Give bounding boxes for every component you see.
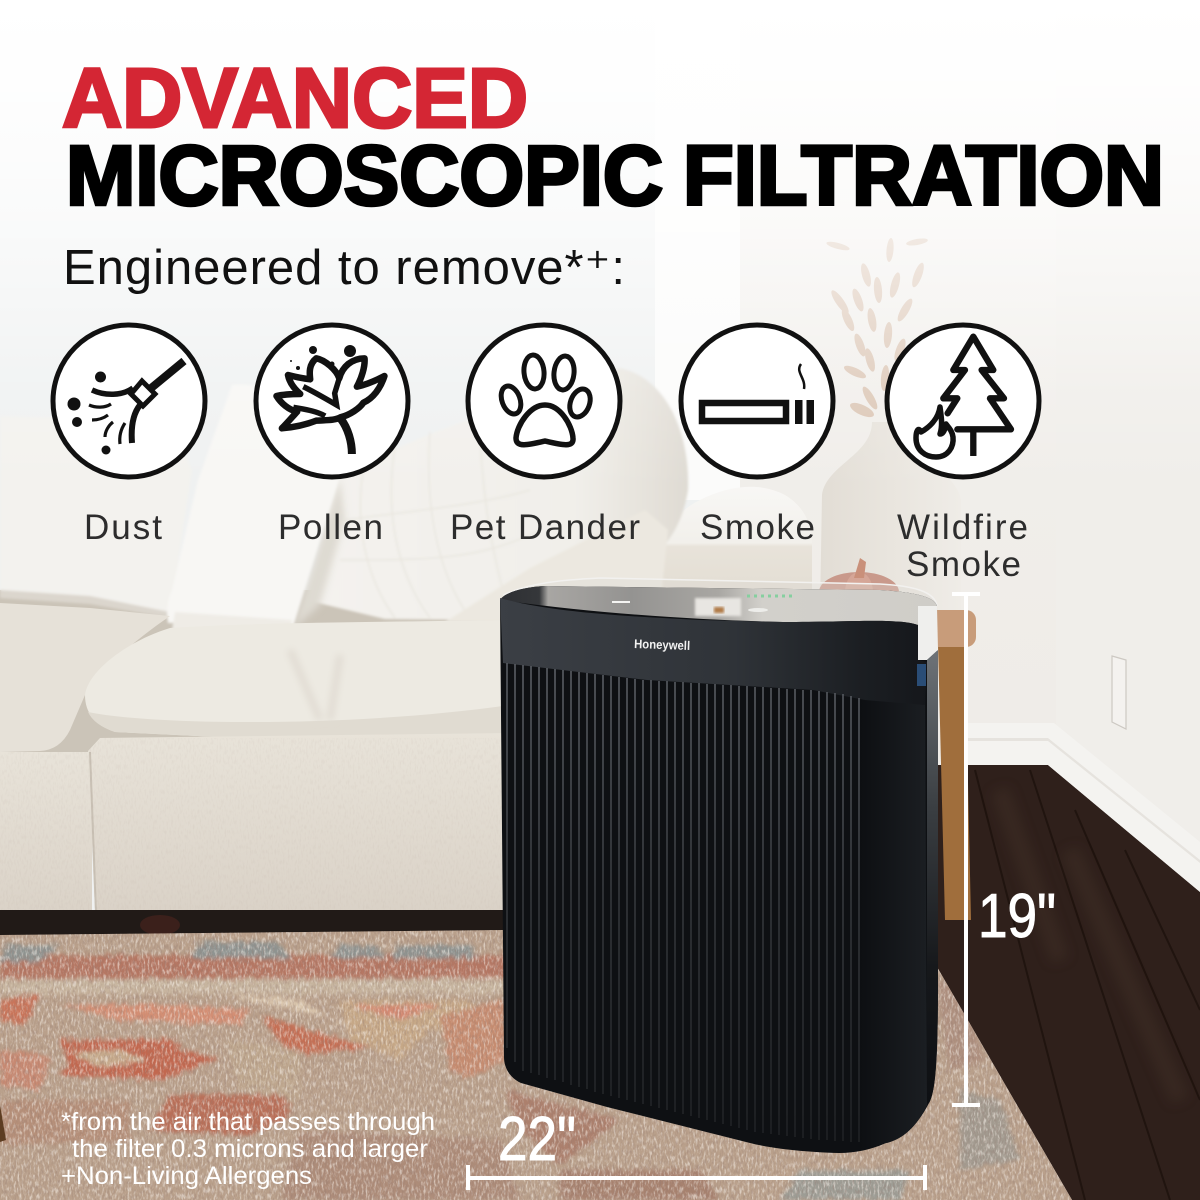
right end panel [860,680,927,1150]
green display dots [747,594,792,598]
footnote: +Non-Living Allergens [61,1162,312,1190]
title: microscopic filtration [66,128,1164,222]
left pillow [0,416,192,616]
logo: Honeywell [634,637,690,653]
gap shadow [292,478,345,630]
label: dust: Dust [84,508,162,547]
side table [925,610,976,920]
right white rim [918,606,938,660]
height value: 19" [978,882,1056,951]
front band [500,598,927,705]
sofa arm right [660,487,812,620]
baseboard [960,723,1200,892]
middle pillow [167,384,342,630]
side panel [927,650,938,1103]
icon: pollen flower [256,325,408,477]
rug [0,925,1080,1200]
title: microscopic filtration: MICROSCOPIC [66,128,663,222]
label: wildfire smoke: Wildfire [897,508,1028,547]
wall outlet [1112,656,1126,729]
footnote [61,1108,435,1190]
dried pampas stems [826,237,928,420]
grille ribs [507,663,859,1142]
icon: wildfire tree [887,325,1039,477]
sofa backing [0,590,510,760]
width value: 22" [498,1105,576,1174]
pumpkin [819,558,899,612]
back wall [720,0,1200,900]
label: wildfire smoke [897,508,1028,584]
stool leg corner [0,1105,6,1142]
vase [820,422,961,610]
footnote: *from the air that passes through [61,1108,435,1136]
main seat cushion [85,620,510,741]
top white fade [0,0,1200,490]
blue side label [917,664,926,686]
air purifier [500,578,938,1153]
pillows [0,368,688,632]
large right pillow [310,368,688,620]
top reflections [612,598,768,616]
glass lid edge [503,578,937,606]
icon: pet paw [468,325,620,477]
sofa base [0,733,520,940]
body silhouette [500,586,938,1153]
wood floor [930,765,1200,1200]
icon: cigarette smoke [681,325,833,477]
left seat cushion [0,603,170,752]
label: wildfire smoke: Smoke [906,545,1021,584]
window frame [655,0,740,500]
label: pet dander: Pet Dander [450,508,640,547]
title: advanced: ADVANCED [62,51,528,145]
pillow fold [445,510,668,622]
title: microscopic filtration: FILTRATION [683,128,1164,222]
subheading: Engineered to remove*⁺: [63,241,625,295]
footnote: the filter 0.3 microns and larger [72,1135,428,1163]
icon: dust broom [53,325,205,477]
label: pollen: Pollen [278,508,383,547]
height dimension arrow [952,594,980,1105]
label: smoke: Smoke [700,508,815,547]
width dimension arrow [468,1165,925,1190]
top glossy face [500,586,937,625]
